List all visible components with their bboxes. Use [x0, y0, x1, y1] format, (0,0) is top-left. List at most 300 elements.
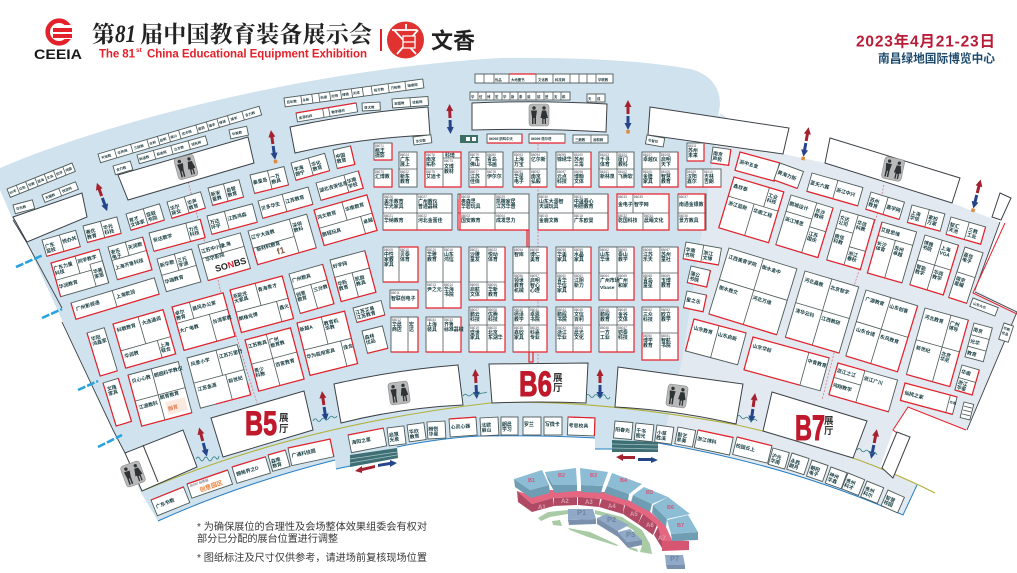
- L block 15: 好学网: [332, 260, 348, 270]
- logo: 文香: [387, 22, 475, 58]
- hall block: B7: [763, 392, 867, 458]
- block 86048: 86049: [618, 308, 627, 312]
- block 86021: [469, 247, 505, 300]
- block 86062: 山东: [600, 251, 610, 258]
- L block 11: 浙能光: [232, 290, 248, 300]
- L block 3: 上海齐鲁科技: [114, 257, 144, 272]
- block 86007: 科技: [488, 316, 498, 323]
- block 86030: [538, 194, 608, 230]
- R block 17: [955, 365, 979, 395]
- R block 8: 文达: [839, 214, 850, 224]
- block 86026: 86022: [418, 214, 427, 218]
- R block 12: 河北万维: [752, 294, 772, 307]
- L block 10: 教育: [175, 313, 187, 322]
- block 86040: 书院: [530, 316, 540, 323]
- small booths: upper left rows: 尚德: [320, 94, 328, 100]
- block 86021: 86005: [470, 283, 479, 287]
- R block 15: 新世纪: [915, 344, 931, 355]
- block 86079: 佛山: [470, 161, 480, 168]
- block 86044: 鹏程: [557, 311, 567, 318]
- L block 8: 江源教科: [138, 399, 159, 411]
- R block 11: [949, 247, 983, 303]
- block 86066: [642, 247, 678, 300]
- small booths: upper left rows: 百年教: [286, 98, 298, 105]
- L block 18 with F1 logo: 教科: [293, 225, 304, 234]
- bottom strip booths: 丽山: [481, 426, 492, 434]
- block 86021: 86021: [470, 248, 479, 252]
- block 86052: 科技: [643, 316, 653, 323]
- block 86048: 金谷: [618, 311, 628, 318]
- L block 23: 亚联: [145, 209, 157, 219]
- block 86024: 展上: [400, 161, 410, 168]
- block 86066: 苏州: [661, 251, 671, 258]
- block 86040: 德泽: [514, 311, 524, 318]
- booth 86111: [687, 143, 704, 161]
- R block 13: 北京智学: [829, 284, 850, 296]
- block 86015: 86013: [427, 283, 436, 287]
- block 86015: 86016: [444, 248, 453, 252]
- R block 22: 鸿翔教学: [832, 382, 853, 394]
- A ring labels: A2: [561, 499, 569, 505]
- L block 10: 台湾家教: [212, 314, 232, 326]
- bottom strip booths: 广东书教: [155, 497, 176, 510]
- block 86054: 启明: [530, 277, 540, 284]
- bottom strip booths: 浙江博科: [696, 435, 717, 446]
- L block 31: 环宇: [210, 222, 222, 231]
- A ring labels: A7: [658, 536, 666, 542]
- R block 12: 江西美育学院: [727, 253, 758, 269]
- bottom strip booths: 朗晨: [502, 421, 512, 428]
- block 86044: 百利: [574, 316, 584, 323]
- small booths: upper left rows: 蓝海: [37, 177, 45, 184]
- block 86030: 明德教育: [574, 203, 594, 210]
- small booths: upper left rows: 宏图教: [394, 100, 405, 106]
- L block 9: 风景小学: [190, 356, 211, 368]
- block 86030: 广东欧曼: [574, 217, 594, 224]
- arrow: entrance 2: [267, 130, 279, 164]
- header divider: [380, 29, 382, 51]
- R block 16: [965, 323, 992, 362]
- block 86034 lower: 装具: [427, 326, 437, 333]
- small booths: top centre rows: 新: [511, 94, 515, 99]
- small booths: top centre rows: 华: [471, 94, 475, 99]
- R block 19: [999, 323, 1014, 342]
- L block 32: [314, 195, 377, 246]
- R block 3: 鹏城设计: [788, 200, 809, 213]
- R block 6: 家校: [928, 214, 939, 223]
- blank hall block: top right 1: [648, 107, 789, 154]
- L block 27: 学海: [293, 164, 305, 173]
- seating blocks B1-B7: B3: [590, 473, 597, 479]
- L block 1: [42, 230, 80, 256]
- block 86058: 86059: [574, 248, 583, 252]
- small booths: upper left rows: 三联教: [133, 143, 145, 150]
- block 86033: 乾国科技: [618, 217, 638, 224]
- small booths: top centre rows: 华联教: [598, 77, 609, 82]
- block 86007: 家具: [470, 334, 480, 341]
- venue: 南昌绿地国际博览中心: [878, 52, 995, 66]
- R block 16: 南京: [972, 326, 984, 335]
- L block 22: 教育: [86, 232, 98, 241]
- R block 12: 衡水金中: [761, 264, 782, 276]
- block 86024: 广东: [400, 156, 410, 163]
- bottom strip booths: 朗格界之D: [235, 464, 260, 478]
- R block 25: 浙江: [703, 249, 714, 258]
- booth 86071: [374, 143, 392, 160]
- bottom strip booths: 华星: [428, 430, 439, 438]
- R block 3: 江苏: [808, 230, 819, 240]
- small booths: top centre rows: 大地图书: [511, 77, 525, 82]
- block 86103: 86101: [600, 170, 609, 174]
- 86112: [711, 147, 731, 165]
- block 86062: 华世: [600, 256, 610, 263]
- title: 第81届中国教育装备展示会: 第: [92, 22, 115, 47]
- block 86058: 86060: [557, 274, 566, 278]
- bottom strip booths: 校园: [882, 499, 894, 509]
- L block 3: 电子: [111, 252, 123, 261]
- R block 23: [744, 337, 829, 391]
- bottom strip booths: 景美: [676, 436, 687, 445]
- block 86037: 南通金银教: [679, 201, 704, 208]
- R block 7: 天池: [948, 226, 959, 235]
- R block 16: 教育: [966, 349, 978, 359]
- header logo: CEEIA: CEEIA: [34, 47, 82, 62]
- R block 20: [960, 402, 974, 420]
- L block 2: 科技: [54, 268, 66, 277]
- block 86052: [642, 307, 678, 360]
- R block 13: [785, 271, 859, 353]
- R block 2: 工业: [767, 192, 779, 201]
- R block 8: 科教: [832, 237, 844, 247]
- small booths: upper left rows: 亚太教: [364, 104, 375, 110]
- R block 2: 浙江蓝新: [727, 200, 748, 212]
- bottom strip booths: 朝阳: [809, 464, 821, 474]
- small booths: upper left rows: 星辰: [197, 125, 206, 131]
- bottom strip booths: 图光: [635, 432, 646, 440]
- L block 28: [333, 146, 355, 169]
- L block 1: 悦办共: [61, 235, 78, 245]
- block 86052: 书院: [661, 342, 671, 349]
- L block 11: 鑫火: [279, 302, 290, 312]
- block 86058: 家具: [557, 287, 567, 294]
- block 86028: 华碧玩具: [461, 203, 481, 210]
- block 86066: 86067: [661, 248, 670, 252]
- R block 15: 博导: [948, 324, 959, 334]
- R block 25: [683, 242, 721, 265]
- block 86093: 86092: [531, 170, 540, 174]
- booth 86070: 86070: [375, 170, 384, 174]
- block 86026: [383, 194, 452, 230]
- L block 6: 华润教: [123, 349, 140, 360]
- block 86021: 86022: [488, 248, 497, 252]
- R block 9: 卓越: [892, 249, 903, 259]
- R block 26: 蒲公: [689, 270, 701, 279]
- L block 27: 教育: [312, 164, 323, 173]
- R block 3: 国庆: [806, 235, 818, 244]
- block 86015: 书院: [444, 291, 454, 298]
- L block 18 with F1 logo: [248, 214, 316, 265]
- block 86009: 中性: [384, 251, 394, 258]
- small booths: top centre rows: 86096 微尔塔: [531, 136, 552, 141]
- L block 10: 大广电教: [179, 323, 200, 335]
- block 86034 lower: 86034: [427, 318, 436, 322]
- bottom strip booths: 罗兰: [524, 421, 534, 428]
- block 86099: 科技: [557, 178, 567, 185]
- block 86058: 青华: [557, 277, 567, 284]
- block 86107: [642, 152, 678, 187]
- A ring labels: [538, 499, 666, 542]
- R block 4: 蓝天六翼: [809, 179, 830, 191]
- bottom strip booths: 智慧: [884, 494, 896, 504]
- R block 2: 科技: [766, 197, 777, 206]
- L block 29: 华南: [346, 176, 357, 185]
- block 86099: 苏州: [574, 156, 584, 163]
- L block 24: 教育: [188, 202, 199, 212]
- L block 19 with SONBS logo: [198, 233, 250, 281]
- block 86054: 86056: [514, 274, 523, 278]
- R block 3: 教研: [813, 212, 825, 221]
- block 86007: 盛世: [470, 329, 480, 336]
- R block 5: 嘉学网: [885, 203, 902, 214]
- block 86058: 86061: [574, 274, 583, 278]
- L block 17: 优品: [365, 337, 376, 346]
- block 86107: 86106: [661, 170, 670, 174]
- L block 4: 广州影视通: [75, 299, 101, 313]
- bottom strip booths: 心灵心器: [450, 423, 470, 431]
- block 86028: 86028: [461, 195, 470, 199]
- block 86054: 教育: [514, 282, 524, 289]
- R block 14: 山东创客: [888, 303, 909, 315]
- R block 11: 南京: [955, 275, 966, 285]
- small booths: upper left rows: 华美教: [231, 129, 243, 136]
- small booths: upper left rows: 瑞丰: [208, 121, 216, 128]
- L block 4: [71, 278, 159, 319]
- block 86054: 86057: [530, 274, 539, 278]
- small booths: top centre rows: 博: [487, 94, 491, 99]
- block 86079: 江苏: [470, 173, 480, 180]
- R block 19: 华教: [1003, 325, 1011, 332]
- L block 20: [157, 249, 201, 292]
- block 86040: 专业: [530, 334, 540, 341]
- L block 29: 学校: [347, 181, 359, 190]
- bottom strip booths: 森南: [270, 456, 282, 465]
- block 86040: [513, 307, 547, 352]
- block 86107: 86108: [661, 153, 670, 157]
- block 86040: 86040: [514, 308, 523, 312]
- blank hall block: upper left 1: [13, 193, 87, 242]
- L block 2: 华润教育: [58, 278, 79, 291]
- block 86012: 华晨: [392, 321, 402, 328]
- block 86026: 86027: [418, 195, 427, 199]
- block 86048: 鹏程: [600, 311, 610, 318]
- block 86030: 86015: [539, 214, 548, 218]
- block 86052: 三众: [643, 312, 653, 318]
- hall block: B5: [211, 391, 313, 457]
- L block 20: 新华教: [159, 258, 175, 269]
- arrows: escalator direction left: [355, 460, 397, 473]
- R block 10: 书院: [921, 244, 933, 253]
- block 86107: 教育: [661, 178, 671, 185]
- block 86028: 江苏华普: [496, 203, 516, 210]
- block 86009: 86010: [400, 248, 409, 252]
- L block 32: 卓越: [362, 216, 374, 226]
- L block 21: 安达教学: [152, 232, 173, 244]
- R block 1: 浙中五金: [738, 158, 759, 170]
- block 86062: 广州: [618, 277, 628, 284]
- bottom strip booths: 朗月: [788, 462, 800, 472]
- block 86107: 天下: [661, 162, 671, 168]
- R block 3: [776, 195, 833, 258]
- R block 1b: 黄海力新: [776, 169, 797, 182]
- R block 10: VGA: [938, 250, 951, 259]
- L block 11: [230, 276, 294, 333]
- L block 10: 卓尔: [174, 308, 185, 317]
- 86112: 南京: [713, 150, 723, 158]
- block 86054: [513, 247, 547, 300]
- L block 13: 三分教: [313, 283, 329, 294]
- small booths: upper left rows: 新语教: [139, 154, 150, 161]
- L block 19 with SONBS logo: SONBS: [214, 256, 247, 274]
- R block 21: [900, 383, 959, 415]
- arrows: escalator direction right: [616, 454, 658, 463]
- block 86012: 商店: [392, 326, 402, 333]
- L block 29: [316, 171, 363, 200]
- L block 21: [149, 219, 205, 251]
- bottom strip booths: 贵州: [845, 477, 857, 487]
- block 86040: 卓恩: [530, 311, 540, 318]
- R block 26: [687, 266, 710, 287]
- centre row 2 booths: [383, 194, 706, 362]
- block 86052: 教学: [661, 316, 671, 323]
- L block 24: 华声: [186, 197, 198, 207]
- block 86076: 艾迪卡: [426, 173, 441, 180]
- small booths: upper left rows: 立方教: [173, 144, 185, 152]
- L block 1: 蓝校: [45, 246, 57, 255]
- block 86079: 青岛: [487, 156, 497, 163]
- arrow: hall door B6 left: [472, 369, 480, 399]
- R block 25: 华南: [685, 246, 696, 255]
- header logo: CEEIA: [34, 21, 82, 62]
- small booths: top centre rows: 成: [597, 96, 601, 101]
- block 86033: 86034: [644, 214, 653, 218]
- block 86058: 水晶: [574, 251, 584, 258]
- L block 23: 文体家: [130, 218, 146, 229]
- L block 18 with F1 logo: 辽宁大连教: [250, 228, 276, 241]
- L block 3: [108, 237, 152, 280]
- block 86054: 86055: [530, 248, 539, 252]
- block 86079: 书画: [487, 161, 497, 168]
- L block 24: [167, 192, 205, 218]
- R block 13: 清华云科: [794, 307, 815, 319]
- block 86024: 教育: [400, 178, 410, 185]
- label: B5 hall: B5: [245, 405, 277, 443]
- R block 10: 博雅: [923, 239, 934, 249]
- L block 16: [353, 300, 385, 322]
- block 86033: 86035: [634, 195, 643, 199]
- L block 22: 华光: [102, 222, 114, 232]
- small booths: upper left rows: 华光教: [15, 204, 27, 211]
- L block 6: [113, 310, 176, 368]
- subtitle: English exhibition name: China Educational Equipment Exhibition: [147, 48, 367, 60]
- block 86026: 广州教仪: [418, 198, 438, 205]
- blank hall block: between B6 and B7: [615, 367, 743, 424]
- L block 8: 朗育: [167, 403, 179, 413]
- small booths: upper left rows: 华文教: [415, 137, 427, 144]
- block 86012: 达: [409, 326, 414, 333]
- block 86048: 86048: [600, 308, 609, 312]
- left section booths (B5 hall): [42, 146, 388, 426]
- block 86107: 卓越仪: [643, 156, 658, 163]
- blank hall block: top right 2: [825, 138, 960, 203]
- small booths: upper left rows: 文具: [46, 173, 55, 180]
- bottom strip booths: 科尔: [862, 490, 874, 500]
- small booths: upper left rows: 合力教: [244, 110, 256, 118]
- icon: toilets lower middle left: [388, 381, 410, 405]
- block 86052: 86050: [643, 334, 652, 338]
- bottom strip booths: 电子: [808, 469, 819, 479]
- small booths: upper left rows: 瑞德网: [407, 82, 418, 88]
- block 86093: 86093: [514, 153, 523, 157]
- block 86062: Vbase: [600, 285, 615, 291]
- R block 9: 艾登思维: [880, 226, 901, 238]
- block 86052: 教育: [643, 342, 653, 349]
- note 1: 部分已分配的展台位置进行调整: [197, 532, 338, 545]
- small booths: top centre rows: 泰: [519, 94, 523, 99]
- bottom strip booths: 神州: [828, 471, 840, 481]
- block 86030: 86018: [574, 214, 583, 218]
- green lawn shapes: [538, 510, 652, 554]
- arrow: entrance 4: [624, 100, 632, 134]
- L block 23: 书院: [147, 214, 158, 224]
- L block 16: 江苏艾易: [354, 305, 375, 316]
- L block 5: 鸿鑫家: [92, 337, 108, 348]
- block 86044: 86043: [574, 326, 583, 330]
- L block 20: 学源: [178, 260, 189, 269]
- block 86040: 86039: [530, 326, 539, 330]
- block 86109: 鑫尔: [687, 178, 697, 185]
- block 86052: 86053: [661, 308, 670, 312]
- icon: toilets lower middle right: [666, 384, 688, 408]
- block 86021: 体育: [488, 256, 498, 263]
- small booths: upper left rows: 华声网: [117, 147, 129, 155]
- block 86040: 86038: [514, 326, 523, 330]
- small booths: top centre rows: 文化教: [538, 77, 549, 82]
- bottom strip booths: 永胜: [790, 457, 801, 467]
- block 86079: [469, 152, 503, 187]
- L block 22: 赛优: [85, 227, 96, 236]
- small booths: upper left rows: 天成: [353, 90, 361, 96]
- label: B5 hall: 厅: [279, 424, 289, 435]
- block 86093: 弘毅: [531, 178, 541, 185]
- small booths: top centre rows: 华: [503, 94, 507, 99]
- arrow: entrance 6: [969, 179, 984, 213]
- title: 第81届中国教育装备展示会: 81: [115, 21, 136, 48]
- block 86062: [599, 247, 634, 300]
- small booths: upper left rows: 天耀教: [44, 192, 56, 200]
- A ring labels: A1: [538, 505, 546, 511]
- block 86054: 机械: [514, 287, 524, 294]
- small booths: upper left rows: 华教: [27, 180, 36, 188]
- block 86007: 86008: [488, 308, 497, 312]
- R block 24: 山东启新: [717, 331, 738, 343]
- block 86040: 教学: [514, 316, 524, 323]
- block 86028: 奥森思: [461, 198, 476, 205]
- block 86009: 家具: [384, 261, 394, 268]
- L block 1: 广东: [44, 241, 56, 250]
- R block 13: 江西教研: [820, 315, 841, 327]
- R block 4: [807, 173, 863, 206]
- icon: toilets top centre: [529, 104, 549, 126]
